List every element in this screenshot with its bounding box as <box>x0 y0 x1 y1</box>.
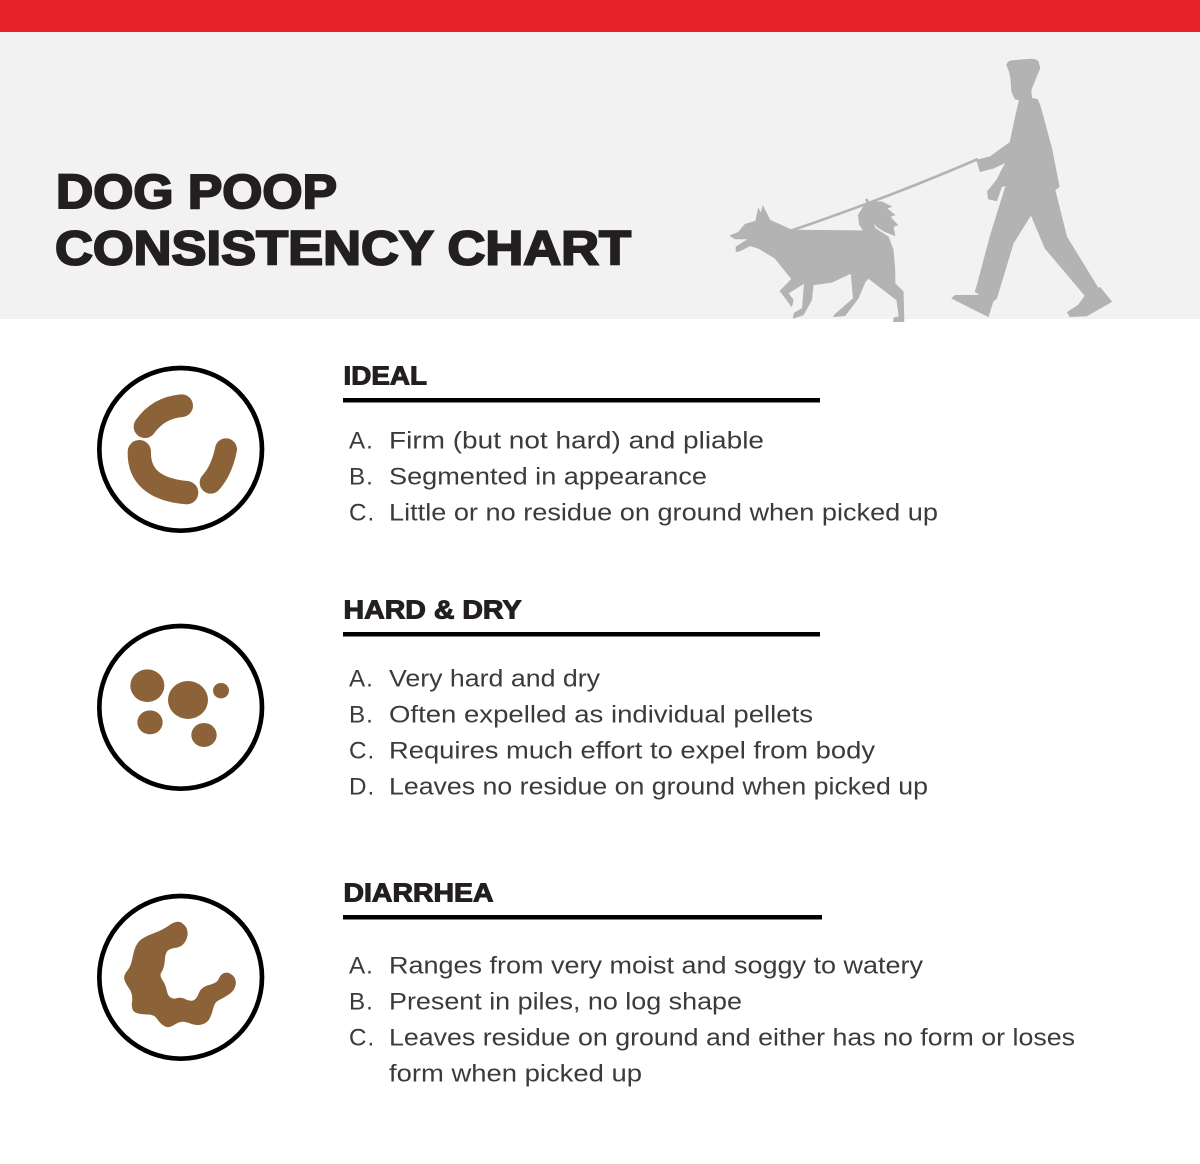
panel: diarrhea <box>99 880 1075 1088</box>
list: ideal <box>349 428 938 526</box>
list: ideal: B. <box>349 464 374 490</box>
list: hard and dry: Requires much effort to expel from body <box>389 738 876 764</box>
list: ideal: C. <box>349 500 375 526</box>
icon: ideal stool circle <box>99 368 262 531</box>
title <box>55 165 631 276</box>
title: DOG POOP <box>56 165 337 219</box>
icon: leash <box>790 159 978 231</box>
heading: diarrhea: DIARRHEA <box>344 880 494 908</box>
list: hard and dry: B. <box>349 702 374 728</box>
header band <box>0 0 1200 319</box>
panel: ideal <box>99 362 938 531</box>
list: diarrhea: B. <box>349 988 374 1016</box>
list: ideal: Segmented in appearance <box>389 464 707 490</box>
list: hard and dry: D. <box>349 774 375 800</box>
list: diarrhea: A. <box>349 952 374 980</box>
list: ideal: Little or no residue on ground when picked up <box>389 500 938 526</box>
icon: hard pellets circle <box>99 626 262 789</box>
panel: hard and dry <box>99 596 928 800</box>
list: diarrhea: Ranges from very moist and soggy to watery <box>389 952 924 980</box>
list: hard and dry: Often expelled as individual pellets <box>389 702 813 728</box>
list: hard and dry <box>349 666 928 800</box>
icon: diarrhea circle <box>99 896 262 1059</box>
list: diarrhea: Present in piles, no log shape <box>389 988 742 1016</box>
list: diarrhea: Leaves residue on ground and either has no form or loses <box>389 1024 1075 1052</box>
heading: hard and dry: HARD & DRY <box>344 596 522 624</box>
icon: dog <box>730 202 904 322</box>
list: hard and dry: Very hard and dry <box>389 666 601 692</box>
heading: ideal: IDEAL <box>344 362 427 390</box>
list: hard and dry: C. <box>349 738 375 764</box>
list: hard and dry: A. <box>349 666 374 692</box>
list: ideal: A. <box>349 428 374 454</box>
list: diarrhea <box>349 952 1075 1088</box>
title: CONSISTENCY CHART <box>55 222 631 276</box>
list: diarrhea: form when picked up <box>389 1060 642 1088</box>
list: ideal: Firm (but not hard) and pliable <box>389 428 764 454</box>
icon: man <box>952 59 1112 317</box>
list: hard and dry: Leaves no residue on ground when picked up <box>389 774 928 800</box>
list: diarrhea: C. <box>349 1024 375 1052</box>
illustration: man walking dog silhouette <box>730 59 1112 322</box>
